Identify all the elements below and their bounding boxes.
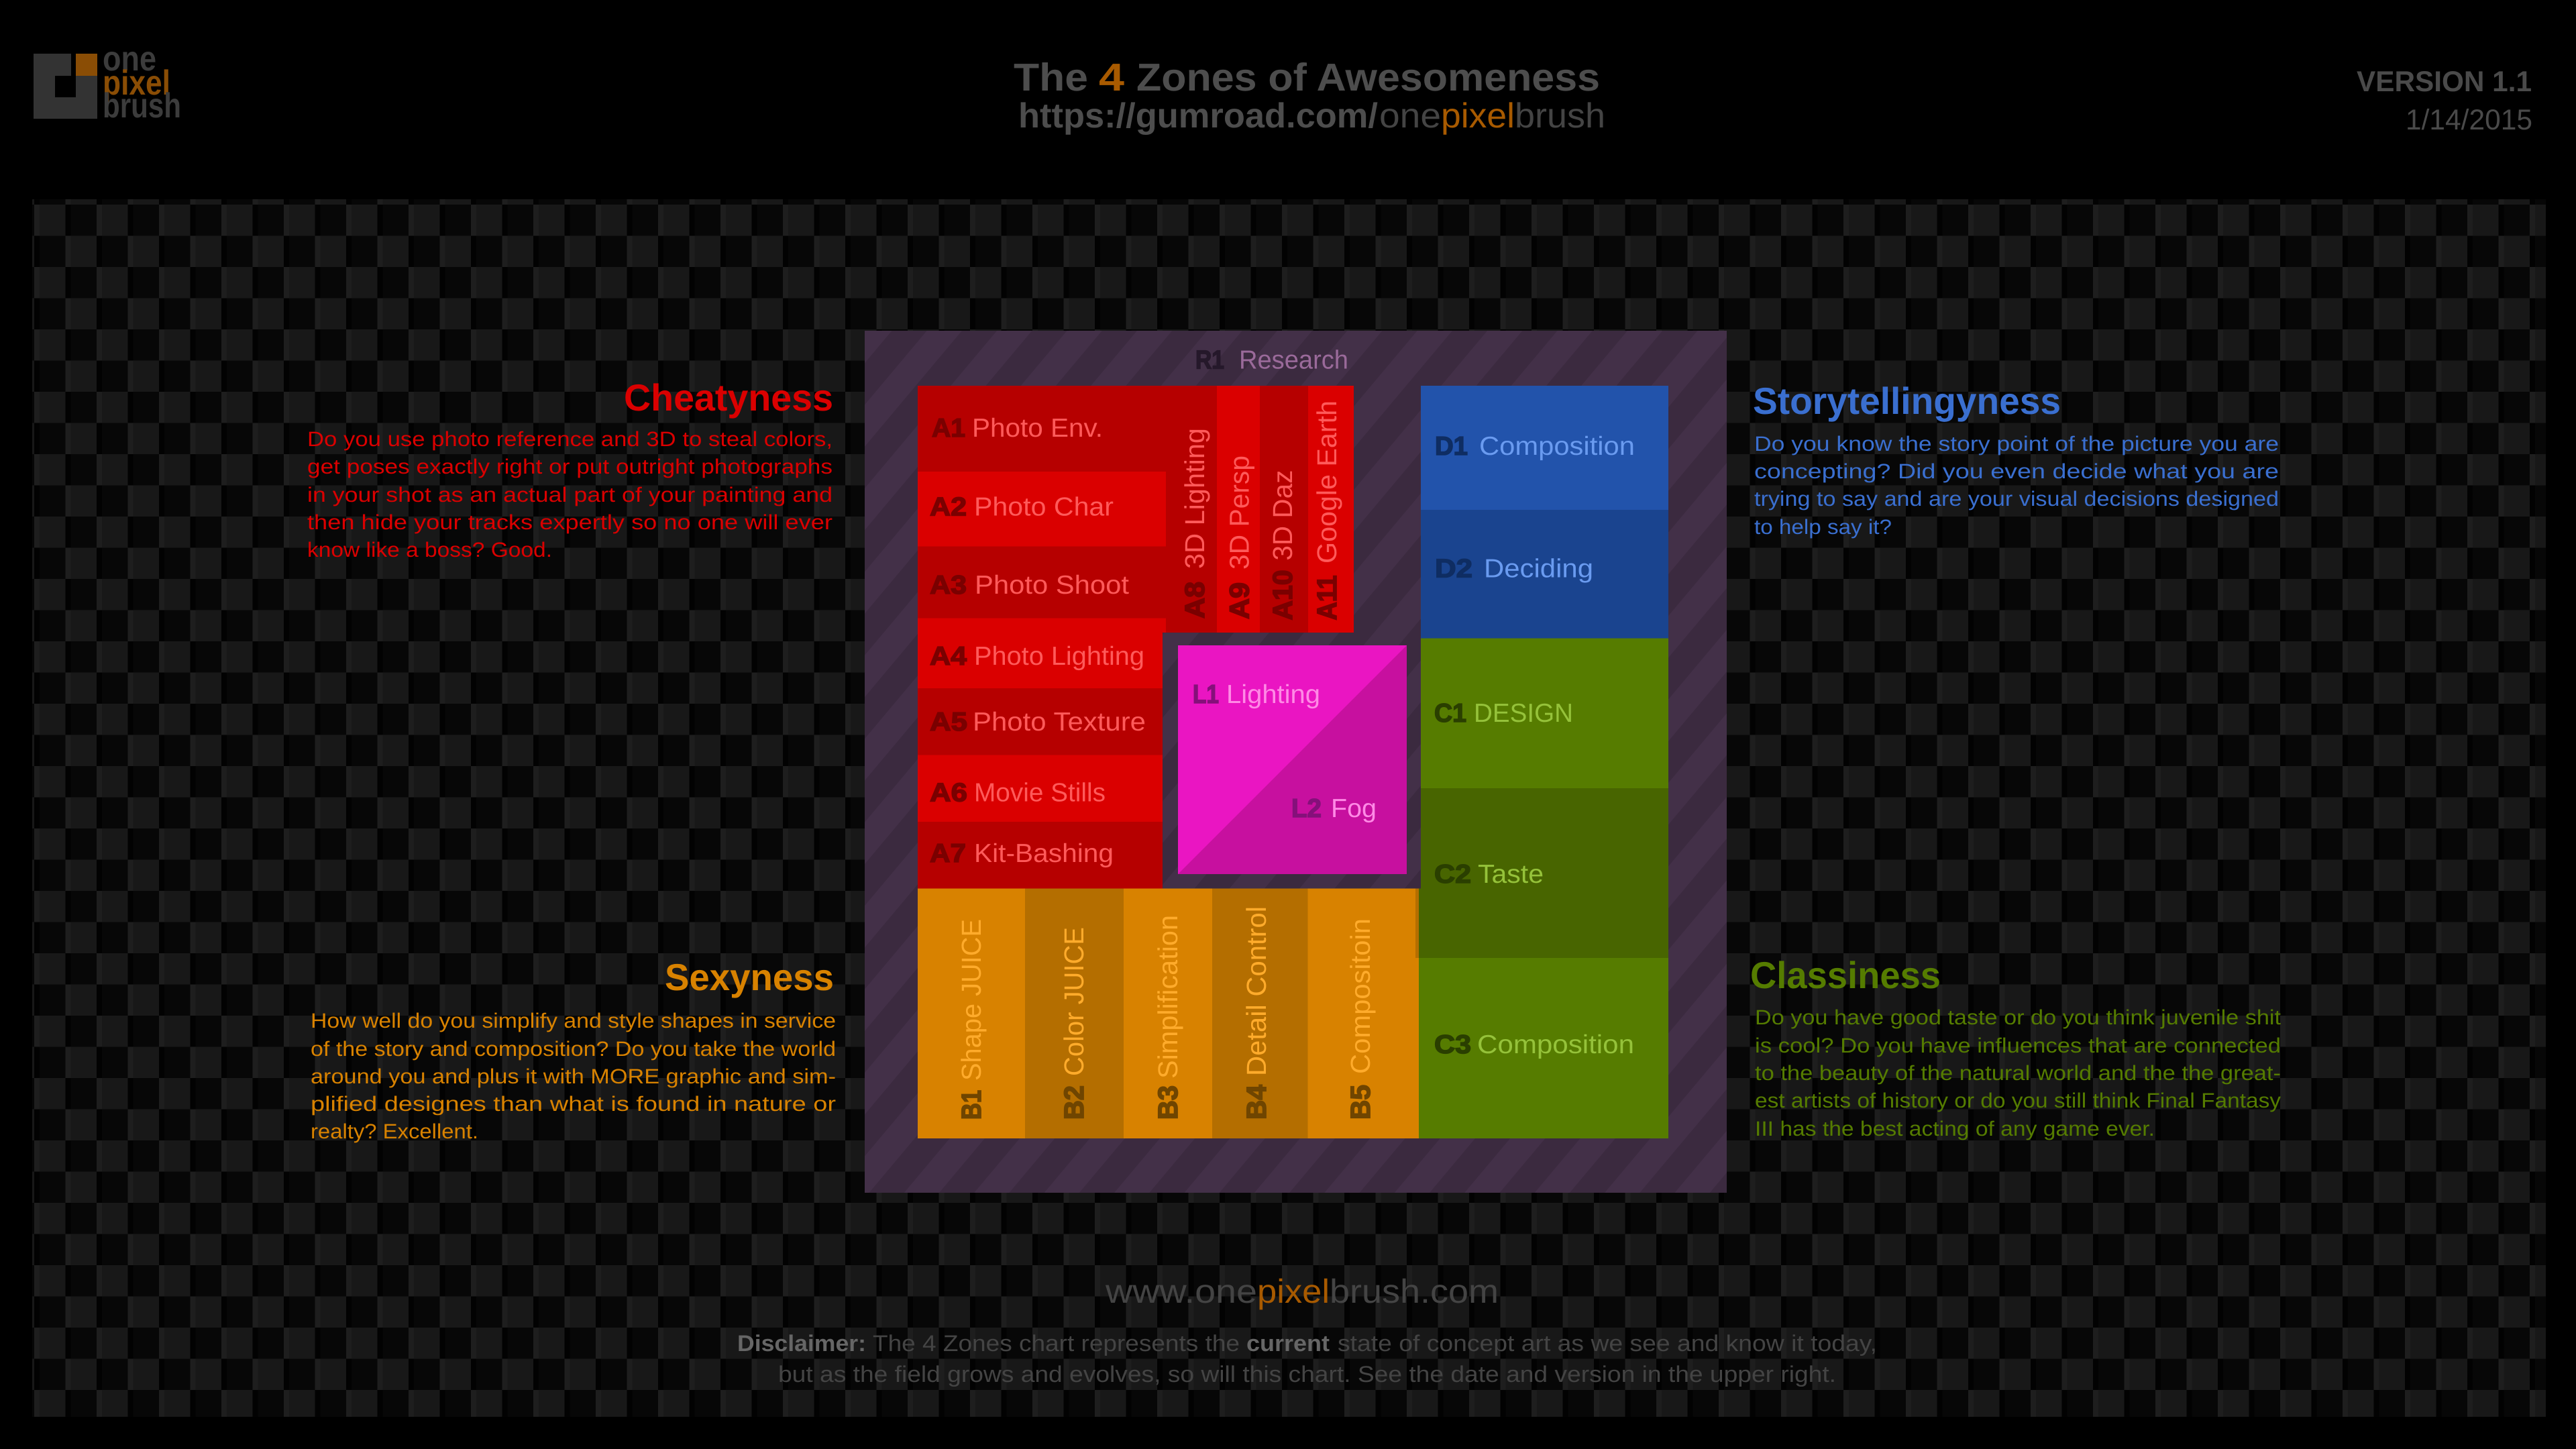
text block: Cheatyness: in your shot as an actual part of your painting and [307, 483, 833, 506]
disclaimer: state of concept art as we see and know it today, [1338, 1331, 1877, 1356]
B1: B1 [956, 1090, 987, 1120]
D2: Deciding [1484, 555, 1593, 584]
text block: Storytellingyness: Do you know the story point of the picture you are [1754, 432, 2279, 455]
text block: Cheatyness: Cheatyness [624, 376, 833, 419]
A9: 3D Persp [1224, 455, 1255, 570]
disclaimer [737, 1331, 1877, 1387]
A10 [1267, 470, 1298, 620]
B3: B3 [1152, 1085, 1183, 1120]
gumroad url: pixel [1441, 97, 1515, 136]
A9: A9 [1224, 582, 1255, 619]
D1: D1 [1435, 432, 1468, 461]
text block: Cheatyness: Do you use photo reference and 3D to steal colors, [307, 427, 833, 451]
A7: Kit-Bashing [974, 839, 1114, 868]
logo: one pixel brush [34, 40, 181, 125]
L1: L1 [1193, 680, 1219, 709]
text block: Cheatyness [307, 376, 833, 561]
D2: D2 [1435, 555, 1472, 584]
B5: Compositoin [1345, 918, 1376, 1074]
zone A: cheatyness blocks [918, 386, 1354, 888]
C1: DESIGN [1474, 699, 1573, 728]
disclaimer: The 4 Zones chart represents the [873, 1331, 1240, 1356]
C3: C3 [1434, 1030, 1471, 1059]
A2: Photo Char [974, 492, 1114, 522]
A1: Photo Env. [972, 414, 1103, 443]
research label: Research [1239, 346, 1348, 375]
text block: Classiness: Do you have good taste or do you think juvenile shit [1755, 1006, 2281, 1029]
text block: Sexyness: How well do you simplify and style shapes in service [311, 1009, 836, 1032]
text block: Storytellingyness: to help say it? [1754, 515, 1892, 539]
logo: one pixel brush: one [103, 40, 156, 78]
gumroad url: brush [1515, 97, 1605, 136]
text block: Sexyness: of the story and composition? Do you take the world [311, 1037, 836, 1061]
B4: B4 [1241, 1085, 1272, 1120]
website url [1105, 1273, 1499, 1310]
L2: Fog [1331, 794, 1377, 823]
text block: Storytellingyness: concepting? Did you even decide what you are [1754, 460, 2279, 483]
D2 [1435, 555, 1593, 584]
A5: A5 [930, 708, 967, 737]
text block: Classiness: est artists of history or do you still think Final Fantasy [1755, 1089, 2282, 1112]
C2 [1434, 860, 1544, 889]
L1: Lighting [1226, 680, 1320, 709]
title: The [1014, 56, 1088, 99]
logo: one pixel brush: brush [103, 87, 181, 125]
A11: A11 [1311, 576, 1342, 620]
title: 4 [1099, 56, 1124, 99]
text block: Sexyness [311, 956, 836, 1143]
A10: 3D Daz [1267, 470, 1298, 561]
B2: Color JUICE [1059, 927, 1089, 1076]
gumroad url [1018, 97, 1605, 136]
A4: A4 [930, 642, 967, 671]
A8: 3D Lighting [1179, 428, 1210, 569]
C2: Taste [1478, 860, 1544, 889]
gumroad url: https://gumroad.com/ [1018, 97, 1378, 136]
A3: Photo Shoot [975, 571, 1129, 600]
A8: A8 [1179, 582, 1210, 619]
A6: A6 [930, 779, 967, 808]
disclaimer: Disclaimer: [737, 1331, 866, 1356]
website url: www.one [1105, 1273, 1257, 1310]
website url: brush.com [1330, 1273, 1499, 1310]
zone C: classiness blocks [1419, 639, 1668, 1138]
D1: Composition [1479, 432, 1635, 461]
text block: Classiness: is cool? Do you have influences that are connected [1755, 1034, 2281, 1057]
version and date [2357, 66, 2532, 136]
text block: Storytellingyness: Storytellingyness [1753, 380, 2061, 422]
A3: A3 [930, 571, 967, 600]
version and date: VERSION 1.1 [2357, 66, 2532, 98]
disclaimer: but as the field grows and evolves, so will this chart. See the date and version in the upper right. [778, 1362, 1836, 1387]
C1: C1 [1434, 699, 1466, 728]
zone D: storytelling blocks [1421, 386, 1668, 639]
text block: Classiness: Classiness [1750, 954, 1941, 996]
text block: Classiness: III has the best acting of any game ever. [1755, 1117, 2155, 1140]
B4: Detail Control [1241, 906, 1272, 1076]
A5: Photo Texture [973, 708, 1146, 737]
text block: Storytellingyness [1753, 380, 2279, 539]
A4: Photo Lighting [974, 642, 1144, 671]
text block: Cheatyness: get poses exactly right or put outright photographs [307, 455, 833, 478]
gumroad url: one [1379, 97, 1441, 136]
L2: L2 [1291, 794, 1322, 823]
A9 [1224, 455, 1255, 619]
A1: A1 [932, 414, 965, 443]
text block: Storytellingyness: trying to say and are your visual decisions designed [1754, 487, 2279, 511]
text block: Sexyness: plified designes than what is found in nature or [311, 1092, 836, 1116]
A7: A7 [930, 839, 966, 868]
disclaimer: current [1246, 1331, 1330, 1356]
A2: A2 [930, 492, 967, 522]
text block: Cheatyness: know like a boss? Good. [307, 538, 552, 561]
A11: Google Earth [1311, 400, 1342, 564]
website url: pixel [1257, 1273, 1330, 1310]
title: Zones of Awesomeness [1136, 56, 1600, 99]
text block: Sexyness: Sexyness [665, 956, 834, 998]
text block: Classiness [1750, 954, 2282, 1140]
A6: Movie Stills [974, 779, 1106, 808]
zone L: lighting and fog square [1178, 645, 1407, 874]
version and date: 1/14/2015 [2406, 104, 2532, 136]
text block: Sexyness: realty? Excellent. [311, 1120, 478, 1143]
B2: B2 [1059, 1085, 1089, 1120]
L2 [1291, 794, 1377, 823]
B1: Shape JUICE [956, 919, 987, 1081]
B3: Simplification [1152, 915, 1183, 1079]
B5: B5 [1345, 1085, 1376, 1120]
panel: 4 zones chart [865, 331, 1727, 1193]
research label: R1 [1195, 346, 1224, 375]
C2: C2 [1434, 860, 1471, 889]
C3: Composition [1477, 1030, 1634, 1059]
A10: A10 [1267, 570, 1298, 620]
text block: Sexyness: around you and plus it with MORE graphic and sim- [311, 1065, 836, 1088]
zone B: sexyness blocks [918, 888, 1419, 1138]
text block: Cheatyness: then hide your tracks expertly so no one will ever [307, 511, 833, 534]
logo: one pixel brush: pixel [103, 64, 170, 103]
text block: Classiness: to the beauty of the natural world and the the great- [1755, 1061, 2281, 1085]
